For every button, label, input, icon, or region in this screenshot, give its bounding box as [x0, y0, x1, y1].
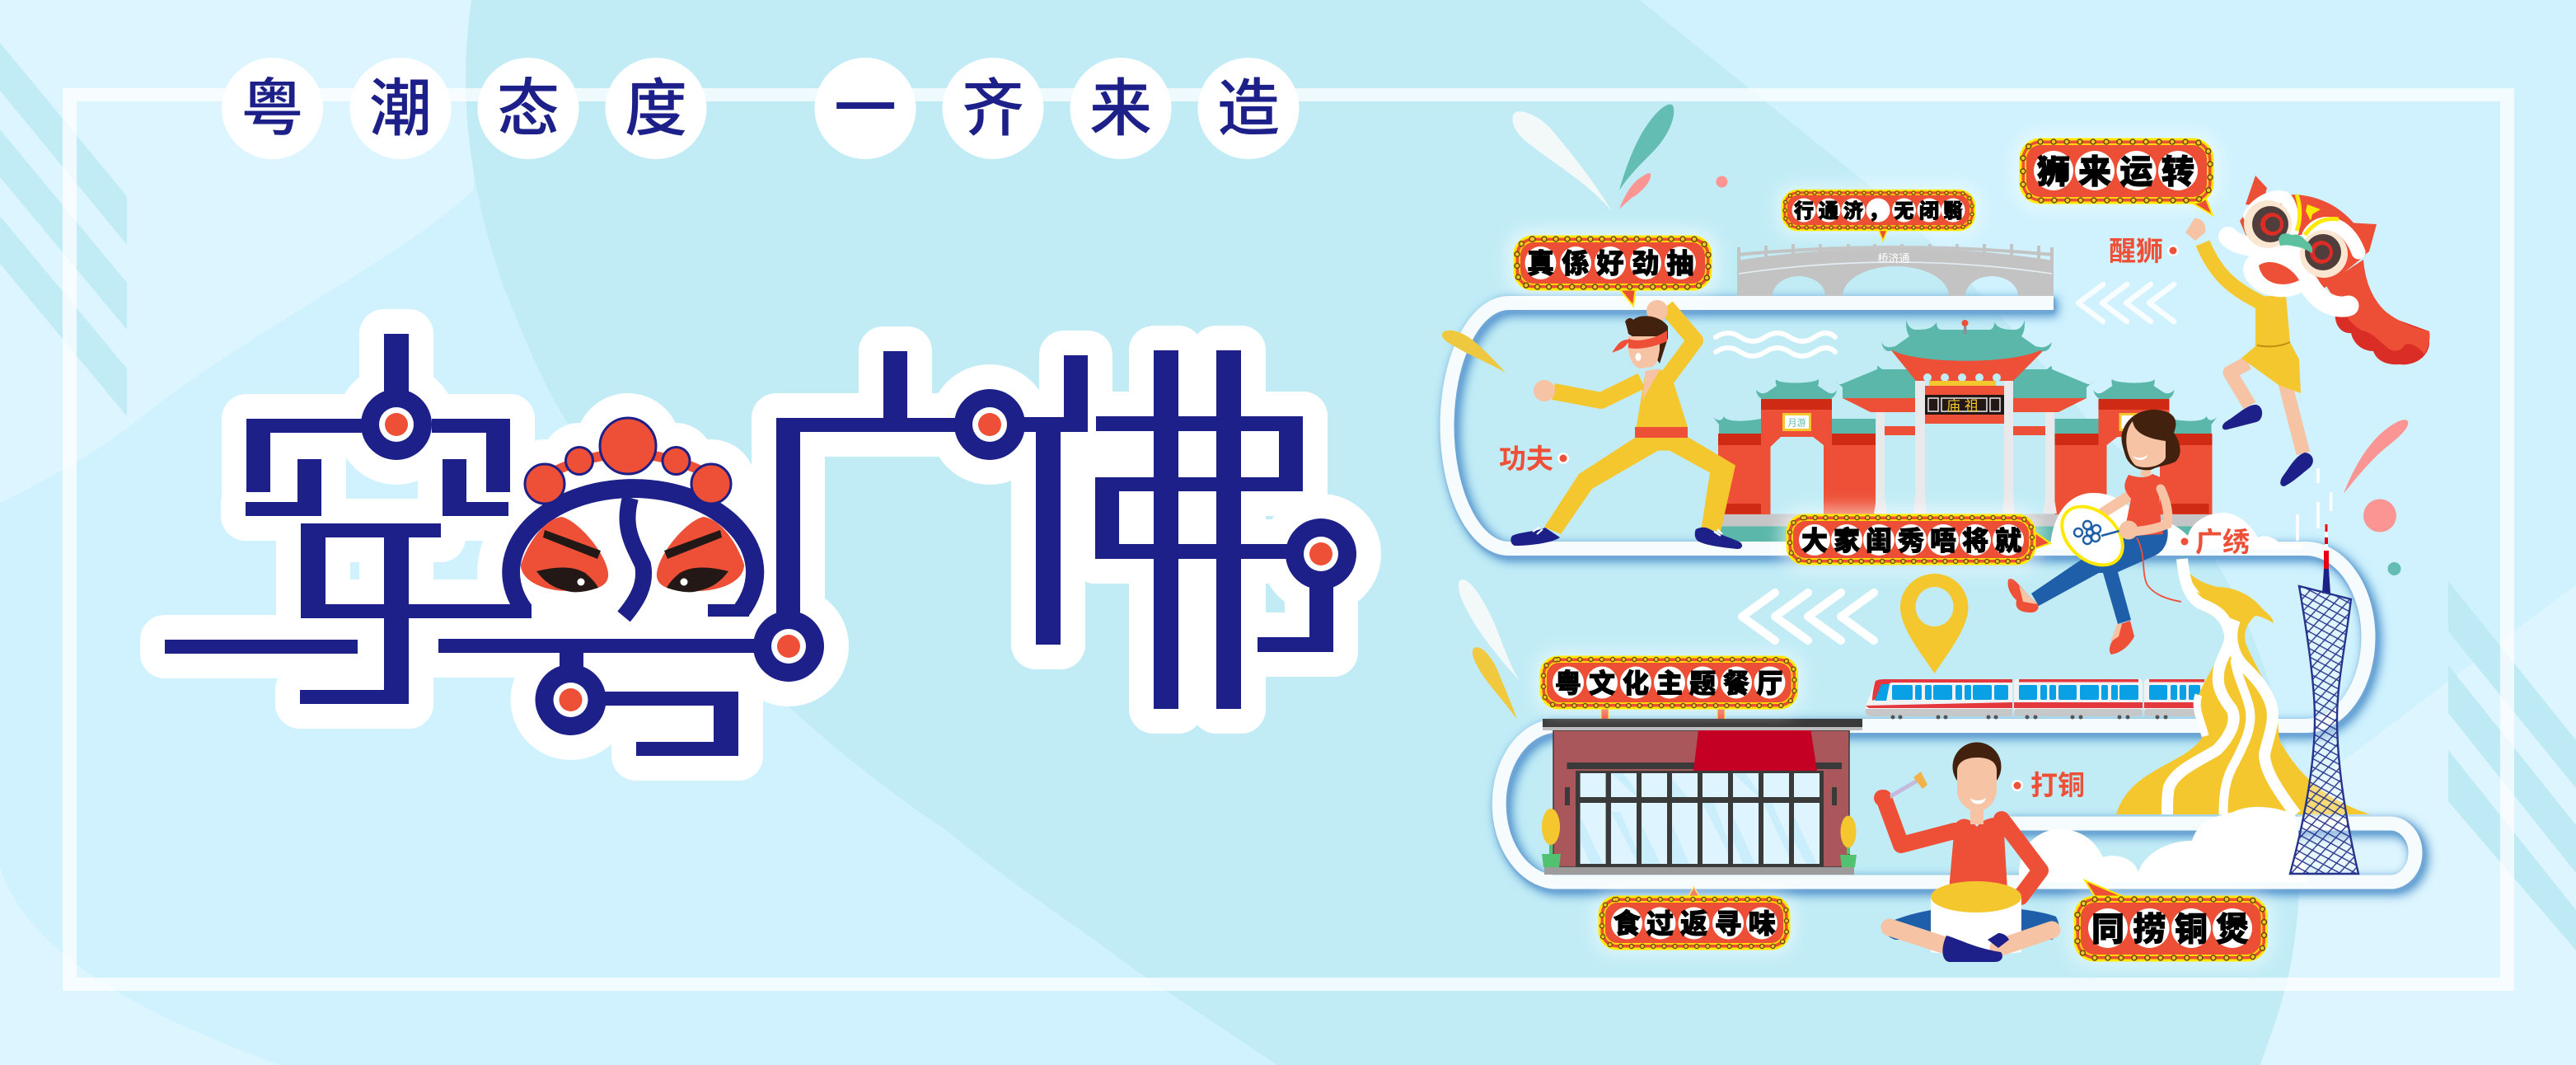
speech bubble: 行通济，无闭翳: 闭	[1919, 200, 1939, 223]
drummer torso	[1949, 818, 2007, 890]
roof	[1543, 719, 1862, 727]
speech bubble: 粤文化主题餐厅: 粤	[1555, 669, 1581, 698]
speech bubble: 大家闺秀唔将就: 唔	[1930, 526, 1956, 556]
drummer mallet	[1882, 772, 1927, 801]
drummer arms	[1884, 798, 2040, 897]
speech bubble: 同捞铜煲: 铜	[2175, 912, 2208, 948]
man torso	[1636, 369, 1688, 430]
woman shirt	[2124, 474, 2166, 536]
title: 粤潮态度 一齐来造: 造	[1217, 74, 1280, 144]
label: 广绣: 广绣	[2195, 527, 2250, 557]
speech bubble: 真係好劲抽: 抽	[1666, 248, 1694, 279]
speech bubble: 行通济，无闭翳: 翳	[1943, 200, 1963, 223]
speech bubble: 大家闺秀唔将就: 就	[1995, 526, 2021, 556]
bridge: 桥济通	[1877, 252, 1910, 265]
restaurant	[1542, 707, 1862, 875]
clouds lower	[2019, 807, 2307, 882]
speech bubble: 狮来运转	[2012, 131, 2221, 215]
speech bubble: 行通济，无闭翳: ，	[1868, 200, 1888, 223]
title: 粤潮态度 一齐来造: 潮	[369, 74, 432, 144]
label: 功夫: 功夫	[1499, 443, 1553, 474]
title: 粤潮态度 一齐来造	[222, 58, 1299, 159]
speech bubble: 食过返寻味: 寻	[1714, 908, 1742, 939]
train lead car	[1866, 679, 2012, 716]
drummer shins	[1890, 927, 2052, 948]
speech bubble: 真係好劲抽: 真	[1527, 248, 1554, 279]
phoenix flame	[2116, 554, 2370, 814]
woman right arm	[2133, 489, 2168, 532]
lion dancer	[2185, 176, 2430, 486]
drum	[1931, 881, 2021, 955]
speech bubble: 大家闺秀唔将就: 将	[1962, 526, 1988, 556]
kung fu man	[1510, 300, 1742, 549]
speech bubble: 行通济，无闭翳: 无	[1894, 200, 1913, 223]
speech bubble: 狮来运转: 狮	[2037, 154, 2070, 190]
speech bubble: 粤文化主题餐厅: 主	[1656, 669, 1683, 698]
background dark central swoosh	[466, 0, 2300, 1065]
title: 粤潮态度 一齐来造: 度	[625, 74, 687, 144]
speech bubble: 同捞铜煲	[2067, 880, 2275, 969]
speech bubble: 行通济，无闭翳: 行	[1794, 200, 1814, 223]
speech bubble: 真係好劲抽: 劲	[1632, 248, 1660, 279]
speech bubble: 粤文化主题餐厅: 餐	[1723, 669, 1749, 698]
speech bubble: 狮来运转: 运	[2119, 154, 2152, 190]
speech bubble: 食过返寻味: 食	[1614, 908, 1642, 939]
side roofs	[1835, 366, 2094, 514]
temple base	[1721, 514, 2213, 526]
man legs	[1544, 437, 1735, 534]
right side hall	[2055, 379, 2217, 514]
title: 粤潮态度 一齐来造: 来	[1089, 74, 1152, 144]
background light bottom-left shape	[0, 868, 279, 1065]
title: 粤潮态度 一齐来造: 态	[497, 74, 560, 144]
decorative splashes right	[2297, 420, 2408, 575]
speech bubble: 大家闺秀唔将就	[1779, 507, 2050, 572]
logo strokes	[165, 334, 1356, 756]
chevron arrows lower	[1742, 593, 1874, 640]
left diagonal stripes	[0, 43, 127, 416]
speech bubble: 大家闺秀唔将就: 家	[1834, 526, 1860, 556]
speech bubble: 狮来运转: 转	[2161, 154, 2194, 190]
base step	[1544, 867, 1854, 875]
lion nose	[2279, 233, 2312, 253]
awning	[1693, 730, 1817, 771]
speech bubble: 食过返寻味: 返	[1680, 908, 1707, 939]
main gate roof	[1891, 350, 2044, 381]
speech bubble: 食过返寻味: 过	[1646, 908, 1674, 939]
speech bubble: 同捞铜煲: 煲	[2216, 912, 2249, 948]
location pin	[1900, 574, 1968, 673]
lion cape	[2325, 260, 2430, 364]
speech bubble: 大家闺秀唔将就: 大	[1801, 526, 1828, 556]
speech bubble: 食过返寻味: 味	[1749, 908, 1775, 939]
speech bubble: 粤文化主题餐厅: 题	[1689, 669, 1716, 698]
train wheels	[1890, 715, 2167, 719]
man head	[1612, 316, 1668, 368]
speech bubble: 同捞铜煲: 捞	[2133, 912, 2166, 948]
woman embroidery hoop	[2050, 495, 2134, 577]
train windows	[1892, 685, 2200, 700]
lion eyes	[2244, 200, 2292, 248]
background light top-left shape	[0, 0, 474, 503]
woman left arm	[2103, 497, 2128, 513]
man arms	[1553, 307, 1695, 401]
opera mask	[502, 418, 764, 617]
drummer shoes	[1942, 933, 2009, 962]
main gate pillars	[1913, 381, 2015, 514]
dancer dress	[2241, 295, 2301, 393]
clouds behind embroidery woman	[2050, 493, 2303, 549]
logo white halo	[165, 334, 1356, 756]
main gate signboard: 庙祖	[1946, 398, 1983, 414]
speech bubble: 粤文化主题餐厅	[1534, 650, 1804, 715]
bridge	[1737, 244, 2054, 296]
chevron arrows upper	[2078, 284, 2174, 321]
right diagonal stripes	[2448, 581, 2576, 950]
title: 粤潮态度 一齐来造: 齐	[962, 74, 1024, 144]
main gate signboard	[1925, 386, 2004, 424]
wall	[1553, 730, 1849, 867]
woman thread	[2137, 537, 2181, 602]
window wall	[1576, 771, 1824, 867]
woman shoes	[2008, 579, 2134, 654]
speech bubble: 粤文化主题餐厅: 化	[1623, 669, 1649, 698]
speech bubble: 粤文化主题餐厅: 文	[1589, 669, 1615, 698]
drummer head	[1953, 742, 2001, 824]
speech bubble: 狮来运转: 来	[2078, 154, 2111, 190]
decorative splashes top-left of scene	[1442, 105, 1727, 373]
potted plants	[1542, 809, 1857, 867]
speech bubble: 同捞铜煲: 同	[2091, 912, 2124, 948]
woman head	[2121, 410, 2180, 476]
logo ring nodes	[379, 407, 1338, 717]
lion mouth	[2259, 262, 2299, 284]
speech bubble: 真係好劲抽: 係	[1562, 248, 1589, 279]
speech bubble: 行通济，无闭翳: 济	[1843, 200, 1863, 223]
speech bubble: 大家闺秀唔将就: 秀	[1898, 526, 1924, 556]
canton tower	[2290, 524, 2358, 874]
man shoes	[1510, 528, 1742, 549]
dancer legs	[2230, 363, 2250, 406]
speech bubble: 真係好劲抽: 好	[1597, 248, 1623, 279]
woman legs	[2031, 528, 2168, 624]
speech bubble: 大家闺秀唔将就: 闺	[1866, 526, 1892, 556]
speech bubble: 食过返寻味	[1593, 887, 1796, 955]
left side hall: 月游	[1788, 417, 1806, 429]
wave lines	[1716, 333, 1835, 356]
train cars	[2014, 679, 2204, 716]
drummer man	[1874, 742, 2059, 962]
splashes left of lower loop	[1459, 579, 1521, 720]
dancer shoes	[2222, 405, 2313, 486]
door handles	[1565, 787, 1837, 805]
speech bubble: 行通济，无闭翳: 通	[1819, 200, 1838, 223]
left side hall	[1713, 379, 1876, 514]
metro train	[1866, 679, 2204, 719]
man fists	[1534, 300, 1668, 401]
dancer arm	[2203, 243, 2262, 303]
title: 粤潮态度 一齐来造: 一	[834, 74, 897, 144]
speech bubble: 行通济，无闭翳	[1776, 184, 1981, 241]
background light bottom-right wedge	[2260, 584, 2576, 1065]
temple gate	[1713, 320, 2217, 542]
road ribbon	[1447, 303, 2419, 886]
speech bubble: 粤文化主题餐厅: 厅	[1756, 669, 1783, 698]
lion head	[2228, 176, 2377, 307]
speech bubble: 真係好劲抽	[1506, 228, 1719, 306]
lintel	[1567, 762, 1842, 769]
logo lettering 穿粤广佛	[165, 334, 1356, 756]
sign posts	[1601, 707, 1725, 720]
label: 醒狮: 醒狮	[2109, 236, 2163, 266]
label: 打铜: 打铜	[2030, 770, 2085, 800]
drummer legs back	[1885, 907, 2059, 940]
title: 粤潮态度 一齐来造: 粤	[241, 74, 303, 144]
embroidery woman	[2008, 410, 2181, 654]
